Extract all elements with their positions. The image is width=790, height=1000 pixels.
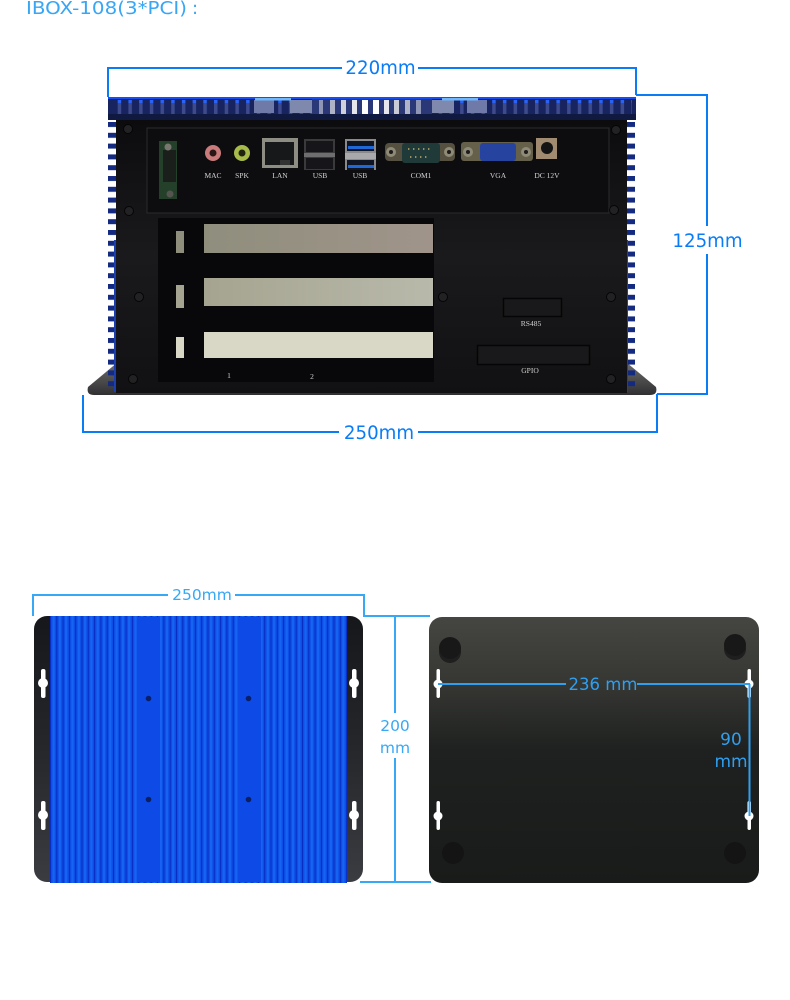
dimension: 125mm: 125mm — [672, 231, 743, 252]
slot numbers: 1 — [227, 371, 231, 380]
port labels: VGA — [490, 171, 507, 180]
port labels — [204, 171, 560, 180]
slot numbers: 2 — [310, 372, 314, 381]
left side fins — [108, 118, 117, 392]
dimension: 200 mm: mm — [380, 739, 410, 757]
dimension: 200 mm — [360, 616, 431, 882]
dimension: 90 mm — [714, 684, 750, 816]
USB 3.0 ports — [345, 139, 376, 170]
top view device — [34, 616, 363, 883]
bottom view plate — [429, 617, 759, 883]
dimension: 200 mm: 200 — [380, 717, 410, 735]
dimension: 220mm: 220mm — [345, 58, 416, 79]
port labels: MAC — [204, 171, 222, 180]
keyhole slots — [434, 669, 754, 830]
front view device — [88, 97, 656, 395]
PCI slot 3 — [204, 332, 433, 358]
GPIO cutout — [478, 346, 590, 375]
mounting plate — [34, 616, 363, 882]
PCI window — [158, 218, 434, 382]
dimension: 90 mm: mm — [714, 752, 748, 772]
RS485 cutout: RS485 — [521, 319, 541, 328]
blue heat sink — [50, 616, 347, 883]
MAC jack — [205, 145, 221, 161]
dimension: 125mm — [636, 95, 743, 394]
VGA port — [461, 142, 533, 161]
port labels: SPK — [235, 171, 249, 180]
strap holes — [146, 696, 251, 802]
terminal block — [159, 141, 177, 199]
PCI slot 1 — [204, 224, 433, 253]
dimension: 250mm top view — [33, 586, 430, 616]
left strap — [137, 617, 160, 882]
dimension: 220mm — [108, 58, 636, 97]
dimension: 250mm front — [83, 394, 657, 444]
COM port — [385, 143, 455, 163]
right strap — [238, 617, 261, 882]
top heat sink band — [108, 97, 636, 120]
mounting feet — [88, 362, 656, 395]
dimension: 90 mm: 90 — [720, 730, 742, 750]
port labels: LAN — [272, 171, 288, 180]
GPIO cutout: GPIO — [521, 366, 539, 375]
USB 2.0 ports — [304, 139, 335, 170]
dimension: 250mm front: 250mm — [344, 423, 414, 444]
port labels: USB — [353, 171, 367, 180]
small slots — [176, 231, 184, 358]
keyhole slots — [38, 669, 359, 830]
port labels: COM1 — [411, 171, 432, 180]
slot numbers — [227, 371, 314, 381]
SPK jack — [234, 145, 250, 161]
LAN port — [262, 138, 298, 168]
chassis body — [116, 118, 627, 393]
rubber feet — [439, 634, 746, 864]
port labels: USB — [313, 171, 327, 180]
PCI slot 2 — [204, 278, 433, 306]
dimension: 250mm top view: 250mm — [172, 586, 232, 604]
RS485 cutout — [504, 298, 562, 328]
dimension: 236 mm: 236 mm — [569, 675, 637, 694]
DC jack — [536, 138, 557, 159]
IO panel — [147, 128, 609, 213]
port labels: DC 12V — [534, 171, 560, 180]
chassis screws — [124, 124, 620, 384]
right side fins — [625, 118, 635, 392]
